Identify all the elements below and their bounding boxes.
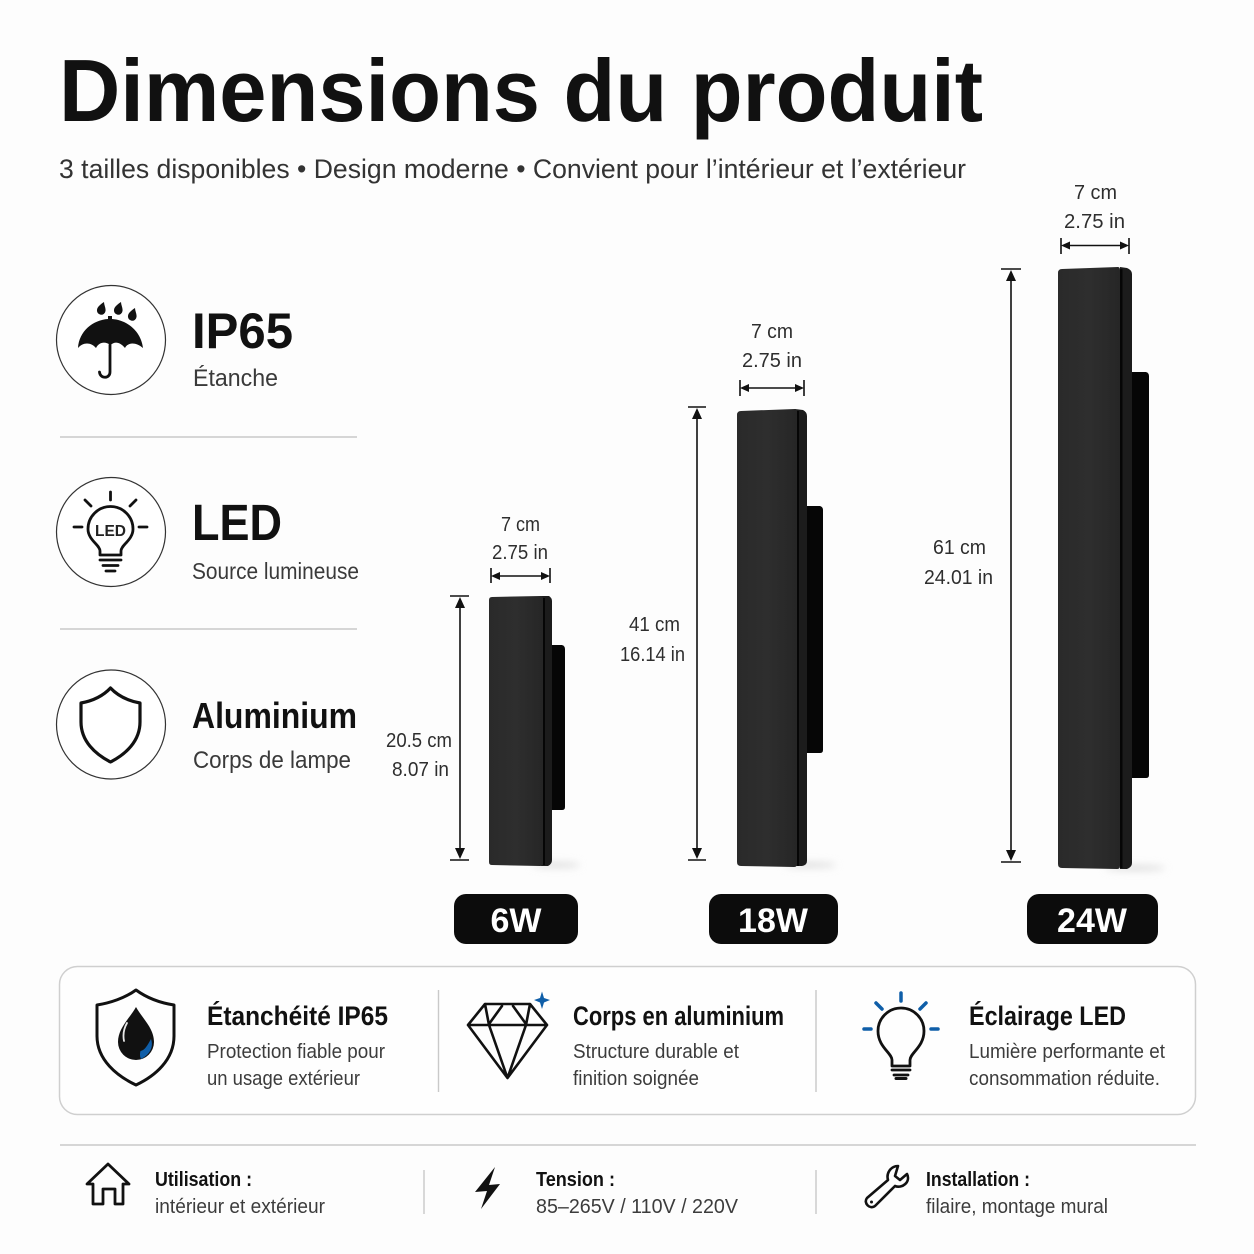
description: Protection fiable pour	[207, 1041, 385, 1063]
height dimension: 8.07 in	[392, 759, 449, 781]
installation label: Installation :	[926, 1169, 1030, 1191]
heading: IP65: IP65	[192, 303, 293, 359]
icon: wrench	[866, 1166, 908, 1207]
wattage badge: 18W	[709, 894, 838, 944]
spec: voltage	[475, 1167, 739, 1218]
label: Étanche: Étanche	[193, 365, 278, 392]
feature: IP65	[56, 286, 293, 394]
panel: benefits	[60, 966, 1196, 1114]
icon: LED bulb	[56, 478, 166, 586]
height dimension: 61 cm	[933, 537, 986, 559]
wattage badge: 18W: 18W	[738, 902, 809, 940]
description: Lumière performante et	[969, 1041, 1165, 1063]
icon: shield with water drop	[97, 990, 174, 1085]
width dimension	[491, 514, 550, 583]
installation value: filaire, montage mural	[926, 1196, 1108, 1218]
height dimension: 41 cm	[629, 614, 680, 636]
usage label: Utilisation :	[155, 1169, 252, 1191]
width dimension: 2.75 in	[492, 542, 548, 564]
wattage badge: 6W: 6W	[490, 902, 542, 940]
product: 18W lamp	[620, 321, 838, 944]
benefit: LED lighting	[864, 993, 1165, 1090]
description: Structure durable et	[573, 1041, 739, 1063]
wattage badge: 6W	[454, 894, 578, 944]
heading: Corps en aluminium	[573, 1001, 784, 1031]
spec: usage	[87, 1164, 325, 1218]
width dimension: 7 cm	[501, 514, 540, 536]
width dimension: 2.75 in	[742, 350, 802, 372]
subtitle: 3 tailles disponibles • Design moderne • Convient pour l’intérieur et l’extérieur	[59, 154, 966, 184]
label: Source lumineuse: Source lumineuse	[192, 558, 359, 584]
width dimension	[1061, 182, 1129, 254]
benefit: waterproofing	[97, 990, 388, 1090]
description	[573, 1041, 739, 1090]
feature: Aluminium	[56, 670, 357, 779]
icon: shield	[56, 670, 166, 779]
height dimension: 24.01 in	[924, 567, 993, 589]
icon: light bulb with blue rays	[864, 993, 938, 1078]
feature: LED	[56, 478, 359, 586]
voltage label: Tension :	[536, 1169, 615, 1191]
height dimension: 16.14 in	[620, 644, 685, 666]
heading: Aluminium: Aluminium	[192, 695, 357, 736]
benefit: aluminium body	[468, 992, 784, 1090]
description: consommation réduite.	[969, 1068, 1160, 1090]
width dimension: 2.75 in	[1064, 211, 1125, 233]
width dimension	[740, 321, 804, 396]
icon: LED bulb: LED	[95, 523, 126, 540]
height dimension	[386, 596, 469, 860]
label: Corps de lampe: Corps de lampe	[193, 747, 351, 774]
title: Dimensions du produit	[59, 41, 983, 140]
wattage badge: 24W: 24W	[1057, 902, 1128, 940]
lamp body	[489, 596, 580, 868]
icon: umbrella	[56, 286, 166, 394]
voltage value: 85–265V / 110V / 220V	[536, 1196, 739, 1218]
description: un usage extérieur	[207, 1068, 360, 1090]
lamp body	[737, 409, 836, 868]
heading: Éclairage LED	[969, 1000, 1126, 1031]
spec: installation	[866, 1166, 1108, 1218]
description	[207, 1041, 385, 1090]
width dimension: 7 cm	[751, 321, 793, 343]
width dimension: 7 cm	[1074, 182, 1117, 204]
height dimension: 20.5 cm	[386, 730, 452, 752]
footer specs	[87, 1164, 1108, 1218]
description: finition soignée	[573, 1068, 699, 1090]
product: 6W lamp	[386, 514, 580, 944]
heading: Étanchéité IP65	[207, 1000, 388, 1031]
wattage badge: 24W	[1027, 894, 1158, 944]
height dimension	[924, 269, 1021, 862]
icon: diamond	[468, 992, 550, 1078]
product: 24W lamp	[924, 182, 1165, 944]
height dimension	[620, 407, 706, 860]
heading: LED: LED	[192, 494, 282, 551]
icon: lightning bolt	[475, 1167, 500, 1209]
lamp body	[1058, 267, 1165, 870]
icon: house	[87, 1164, 129, 1204]
usage value: intérieur et extérieur	[155, 1196, 325, 1218]
description	[969, 1041, 1165, 1090]
